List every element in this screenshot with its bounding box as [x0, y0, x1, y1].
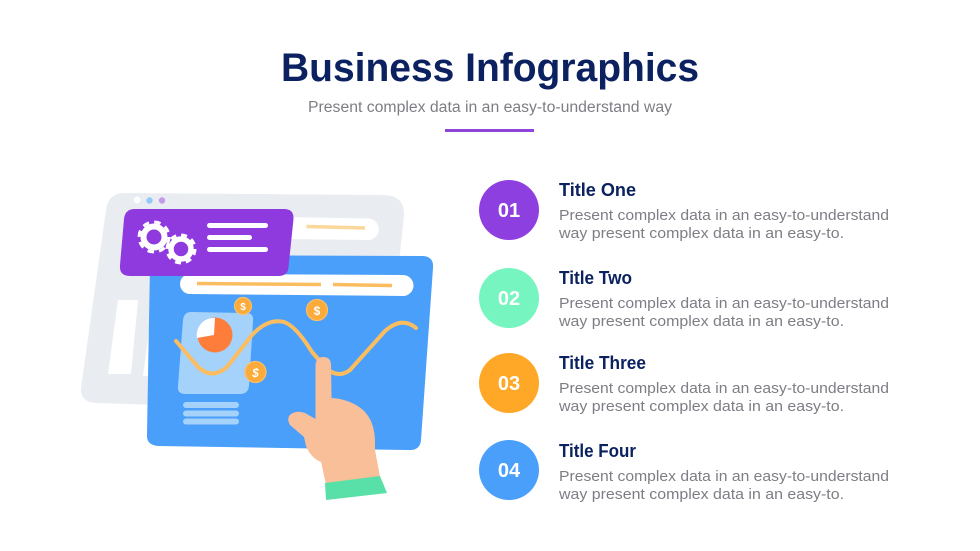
badge 04 — [479, 440, 539, 500]
coin 3 — [245, 362, 266, 382]
badge 01: 01 — [498, 200, 520, 222]
description — [558, 295, 889, 330]
badge 02: 02 — [498, 288, 520, 310]
title: Business Infographics — [281, 46, 699, 90]
item 1 — [479, 180, 889, 242]
description: Present complex data in an easy-to-understand — [559, 295, 889, 312]
badge 04: 04 — [498, 460, 521, 482]
illustration: dashboard with pointing hand — [81, 193, 433, 500]
sleeve cuff — [325, 476, 387, 500]
badge 01 — [479, 180, 539, 240]
badge 02 — [479, 268, 539, 328]
icon: large gear — [139, 222, 169, 252]
description — [558, 380, 889, 415]
subtitle: Present complex data in an easy-to-understand way — [308, 99, 672, 116]
description: way present complex data in an easy-to. — [558, 486, 844, 503]
title underline — [445, 129, 534, 132]
item 4 — [479, 440, 889, 503]
coin 3: $ — [251, 366, 259, 380]
chart card with pie — [178, 312, 253, 394]
coin 2: $ — [314, 304, 321, 318]
description — [558, 207, 889, 242]
heading: Title Two — [559, 268, 632, 288]
badge 03: 03 — [498, 373, 520, 395]
description: Present complex data in an easy-to-understand — [559, 207, 889, 224]
description: way present complex data in an easy-to. — [558, 398, 844, 415]
back browser window — [81, 193, 404, 405]
description: Present complex data in an easy-to-understand — [559, 468, 889, 485]
heading: Title Four — [559, 441, 636, 461]
item 2 — [479, 268, 889, 330]
coin 1: $ — [240, 302, 246, 313]
item 3 — [479, 353, 889, 415]
hand pointing — [288, 357, 380, 484]
description: Present complex data in an easy-to-understand — [559, 380, 889, 397]
text lines under card — [183, 402, 239, 424]
icon: small gear — [167, 235, 195, 263]
heading: Title One — [559, 180, 636, 200]
description: way present complex data in an easy-to. — [558, 313, 844, 330]
coin 1 — [234, 298, 252, 314]
description: way present complex data in an easy-to. — [558, 225, 844, 242]
coin 2 — [306, 300, 328, 320]
front blue panel — [147, 255, 433, 450]
badge 03 — [479, 353, 539, 413]
description — [558, 468, 889, 503]
line chart curve — [176, 321, 416, 374]
purple settings card — [120, 209, 294, 276]
address bar — [180, 274, 414, 296]
heading: Title Three — [559, 353, 646, 373]
